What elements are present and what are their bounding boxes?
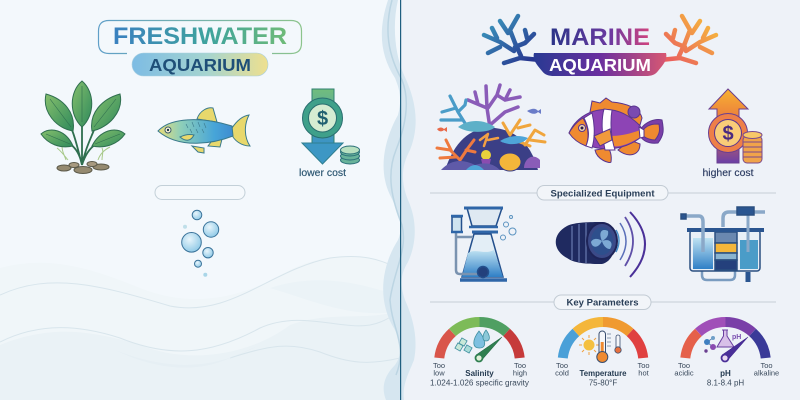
- panel: freshwater background: [0, 0, 400, 400]
- icon: lower cost arrow: [299, 89, 360, 179]
- panel: marine background: [400, 0, 800, 400]
- section header: specialized equipment: Specialized Equipment: [550, 188, 655, 200]
- vertical divider line: [400, 0, 401, 400]
- section header: key parameters: Key Parameters: [566, 298, 638, 308]
- gauge: temperature: Temperature: [580, 369, 627, 378]
- icon: droplets and crystals: [455, 330, 489, 353]
- icon: gold coin stack: [743, 132, 762, 163]
- gauge: temperature: Too: [556, 361, 568, 370]
- icon: clownfish: [569, 98, 663, 162]
- icon: freshwater plant: [41, 81, 125, 174]
- empty label pill: [155, 186, 245, 200]
- gauge: salinity: Salinity: [465, 369, 494, 378]
- gauge needle: [476, 337, 502, 361]
- icon: wave pump: [556, 212, 645, 277]
- icon: higher cost arrow: [702, 89, 762, 179]
- gauge: salinity: Too: [514, 361, 526, 370]
- icon: freshwater fish: [158, 108, 250, 153]
- gauge: ph: 8.1-8.4 pH: [707, 378, 744, 388]
- title: freshwater: [98, 20, 302, 76]
- gauge: ph: alkaline: [754, 368, 779, 378]
- title pill: aquarium: AQUARIUM: [149, 55, 251, 75]
- title: marine: MARINE: [550, 24, 650, 51]
- gauge: salinity: 1.024-1.026 specific gravity: [430, 378, 529, 388]
- icon: coin stack: [340, 146, 360, 164]
- icon: higher cost arrow: $: [722, 123, 734, 145]
- gauge needle: [722, 337, 748, 361]
- background waves: [0, 256, 400, 400]
- gauge: ph: pH: [720, 369, 731, 378]
- icon: coral reef: [437, 85, 545, 171]
- gauge: ph: acidic: [674, 368, 694, 378]
- icon: lower cost arrow: lower cost: [299, 168, 346, 179]
- gauge: ph: Too: [678, 361, 690, 370]
- icon: protein skimmer: [451, 208, 516, 280]
- icon: higher cost arrow: higher cost: [702, 168, 754, 179]
- gauge: temperature: hot: [638, 368, 650, 378]
- icon: bubbles: [182, 210, 219, 277]
- icon: lower cost arrow: $: [317, 108, 328, 130]
- gauge: temperature: cold: [555, 368, 569, 378]
- gauge: temperature: 75-80°F: [589, 378, 617, 388]
- title: freshwater: FRESHWATER: [113, 23, 287, 50]
- left coral ornament: [484, 16, 540, 63]
- gauge: salinity: low: [433, 368, 445, 378]
- icon: molecule and flask: pH: [732, 334, 741, 341]
- icon: thermometers and sun: [579, 331, 621, 362]
- title: marine: [484, 16, 716, 76]
- right coral ornament: [660, 16, 716, 63]
- gauge: ph: [674, 322, 779, 388]
- marine banner: AQUARIUM: [549, 55, 651, 75]
- gauge: salinity: Too: [433, 361, 445, 370]
- title pill: aquarium: [132, 53, 268, 76]
- centre water ribbon divider: [382, 0, 416, 400]
- gauge: temperature: [555, 322, 650, 388]
- marine banner: [534, 53, 666, 76]
- gauge: salinity: high: [513, 368, 527, 378]
- section header: key parameters: [430, 295, 776, 310]
- gauge: ph: Too: [760, 361, 773, 370]
- icon: sump filter: [681, 207, 765, 282]
- gauge: temperature: Too: [637, 361, 650, 370]
- section header: specialized equipment: [430, 186, 776, 200]
- gauge: salinity: [430, 322, 529, 388]
